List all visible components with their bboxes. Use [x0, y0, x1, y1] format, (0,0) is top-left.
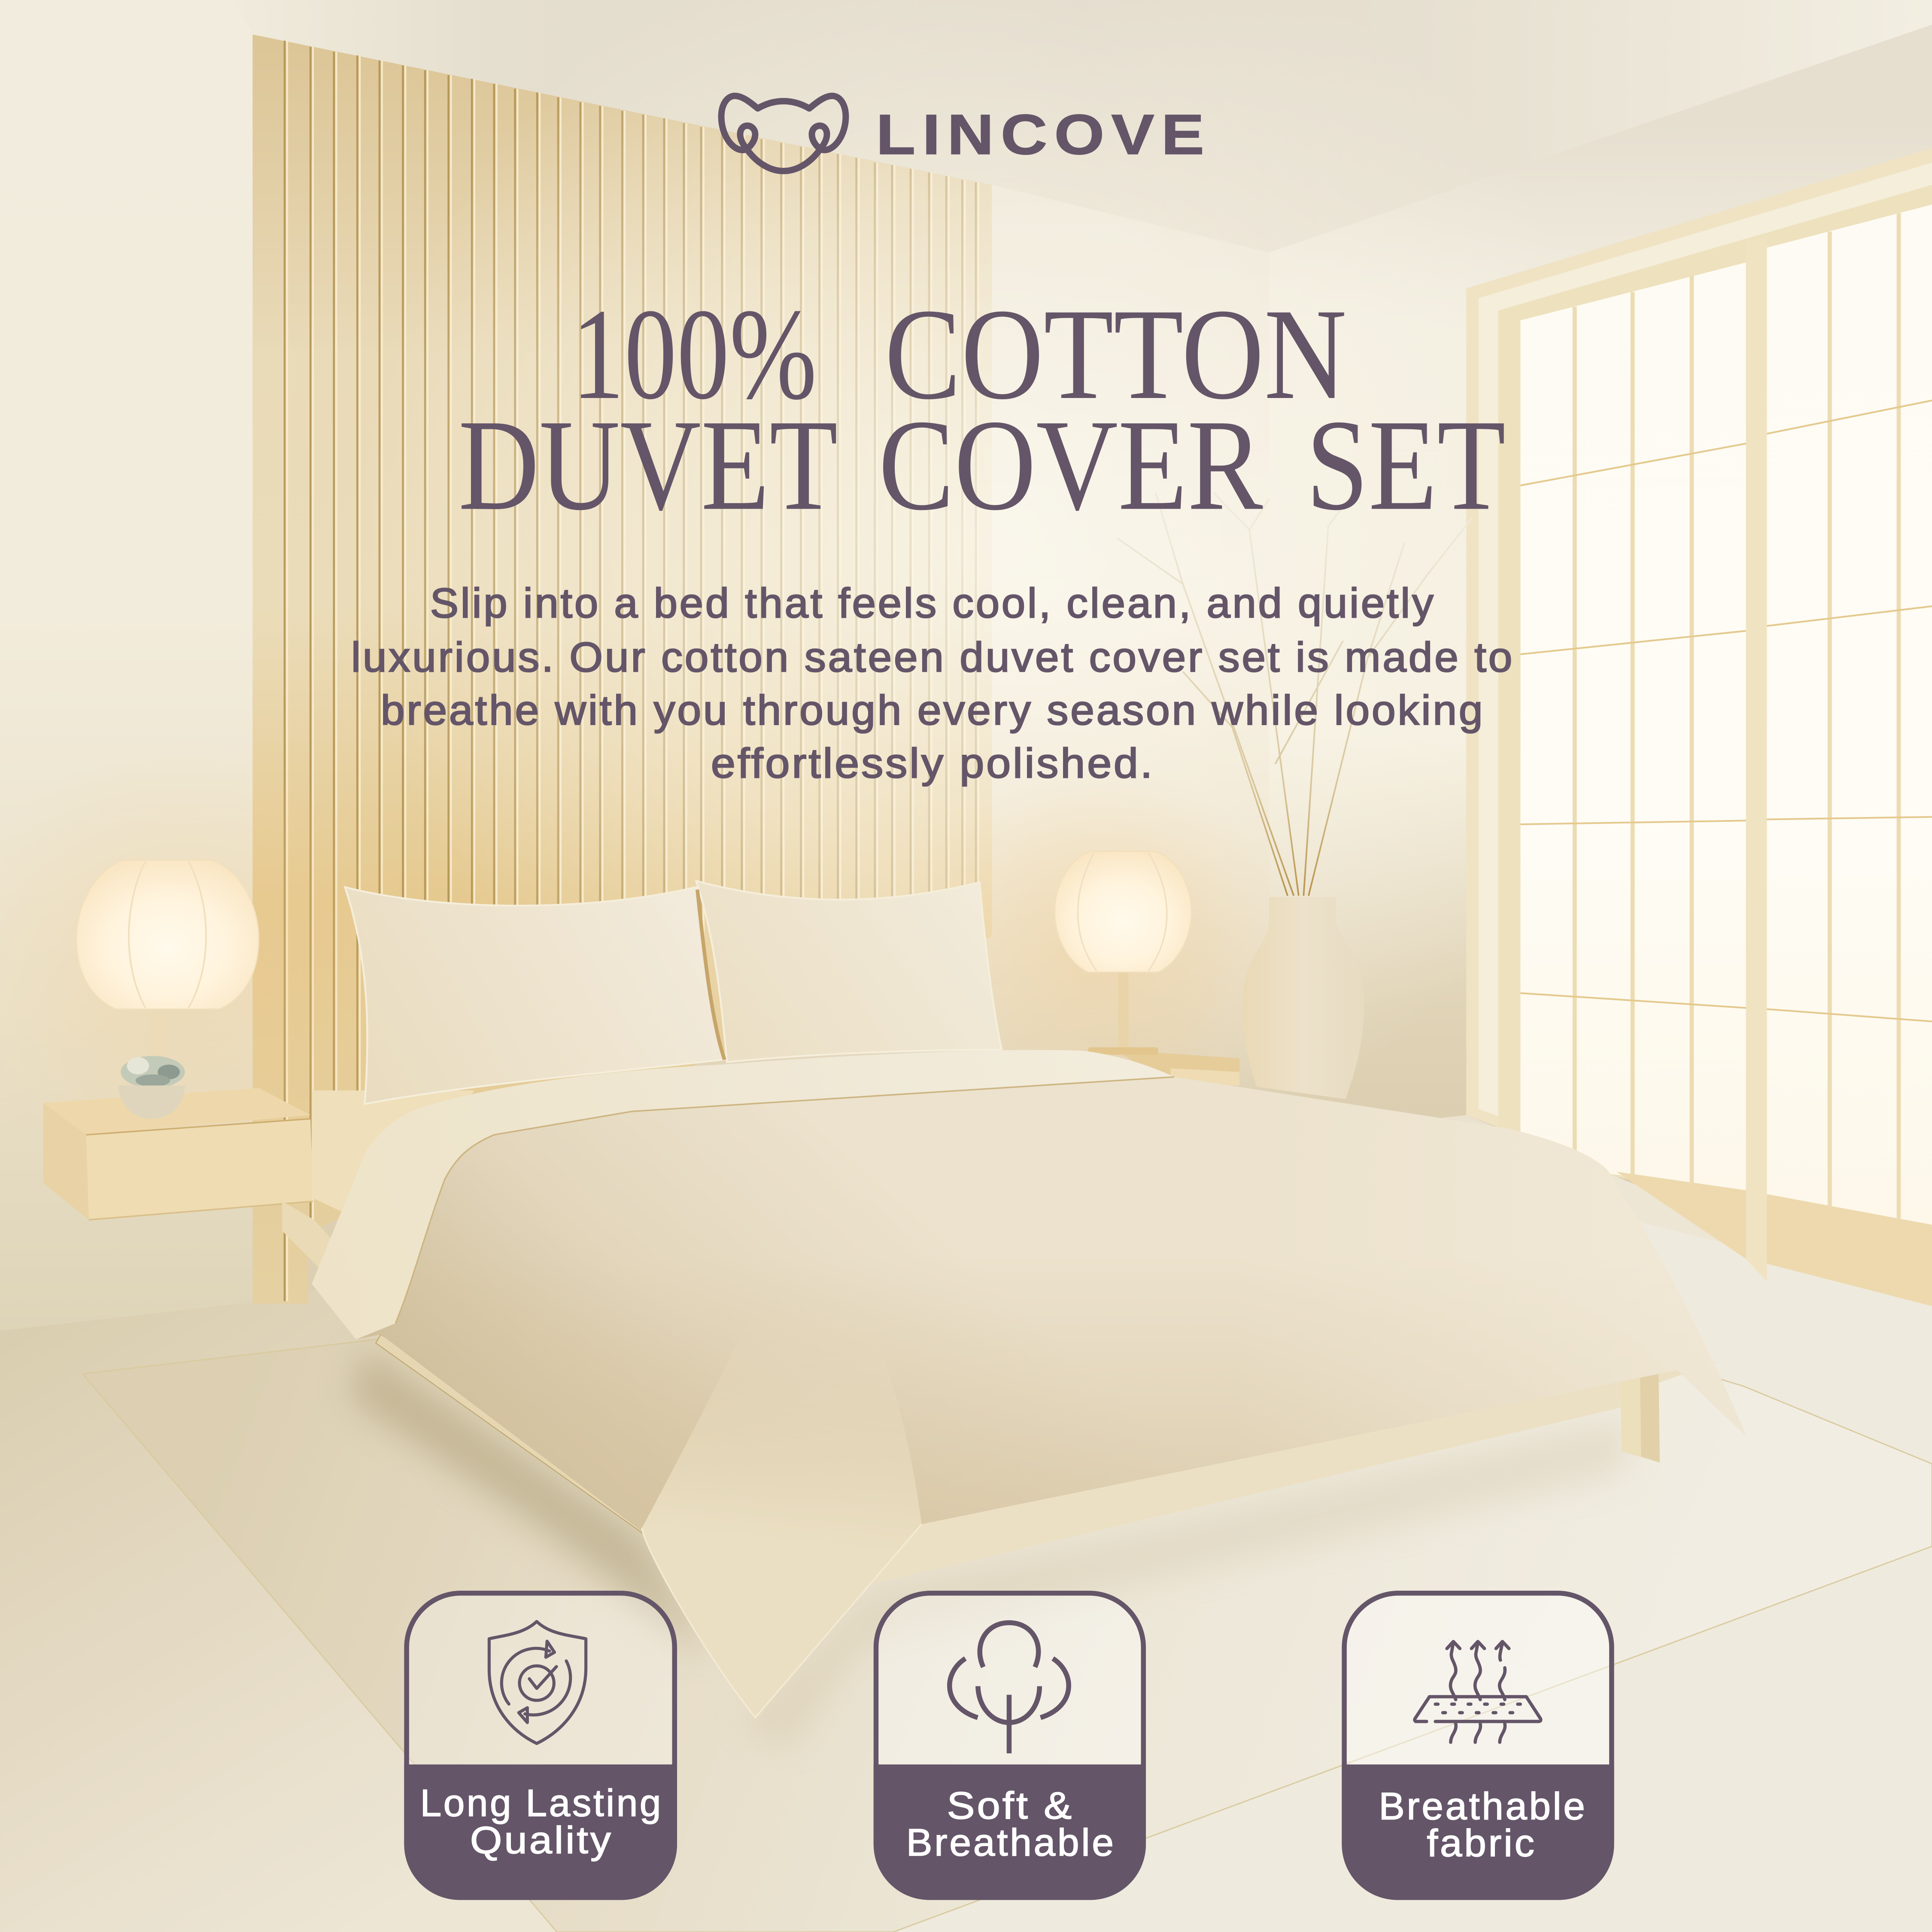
logo wordmark: LINCOVE	[876, 103, 1211, 166]
right lamp glow	[899, 764, 1294, 1133]
intro paragraph: Slip into a bed that feels cool, clean, and quietly	[430, 580, 1435, 626]
window reveal	[1479, 163, 1932, 1288]
center mullion	[1746, 237, 1767, 1282]
lower side rail	[282, 1201, 370, 1318]
right sash panes	[1767, 204, 1932, 1225]
wooden slat headboard	[252, 34, 992, 1303]
turned-down fold	[312, 1050, 1174, 1340]
duvet right highlight	[1232, 1087, 1746, 1461]
right pillow	[696, 881, 1002, 1062]
feature card: soft and breathable	[874, 1593, 1146, 1900]
brand logo	[721, 96, 1211, 171]
title: COVER	[878, 392, 1264, 537]
feature card: breathable fabric	[1342, 1593, 1614, 1900]
left lamp	[76, 860, 259, 1072]
bed leg	[1620, 1365, 1660, 1463]
right lamp	[1055, 851, 1191, 1055]
icon: cotton boll	[950, 1623, 1069, 1753]
intro paragraph: effortlessly polished.	[711, 740, 1154, 787]
window	[1466, 148, 1932, 1306]
left rail	[376, 1334, 649, 1533]
label: Breathable	[1379, 1784, 1587, 1827]
intro paragraph: breathe with you through every season while looking	[381, 687, 1485, 733]
rug	[82, 1232, 1932, 1932]
window casing	[1466, 148, 1932, 1306]
left lamp glow	[0, 739, 419, 1207]
intro paragraph: luxurious. Our cotton sateen duvet cover set is made to	[351, 634, 1514, 680]
intro paragraph	[351, 580, 1514, 787]
window inner frame	[1498, 185, 1932, 1245]
right floor	[893, 1183, 1932, 1932]
floor	[0, 1115, 1932, 1932]
bed frame	[282, 1201, 1719, 1585]
right nightstand	[1115, 1050, 1239, 1085]
front drape	[642, 1305, 922, 1718]
duvet	[312, 1050, 1746, 1718]
label: Long Lasting	[420, 1781, 663, 1824]
title	[459, 282, 1506, 537]
glazing bars vertical	[1575, 213, 1899, 1220]
potted plant	[118, 1056, 185, 1119]
glazing bars horizontal	[1520, 401, 1932, 1021]
ceiling	[234, 0, 1932, 252]
sill	[1616, 1172, 1932, 1306]
front rail	[869, 1361, 1719, 1585]
fitted sheet	[312, 1091, 474, 1214]
branches	[1118, 487, 1473, 896]
feature card: soft and breathable: Breathable	[906, 1821, 1116, 1864]
central light glow	[246, 0, 1602, 1232]
label: Soft &	[947, 1784, 1074, 1827]
right wall	[1269, 24, 1932, 1306]
duvet lower shading	[356, 1050, 1746, 1718]
back wall	[252, 34, 1269, 1306]
feature card: long lasting quality	[404, 1593, 677, 1900]
pillows and sheet	[312, 881, 1002, 1214]
left wall	[0, 0, 320, 1355]
duvet main body	[356, 1050, 1746, 1718]
title: DUVET	[459, 392, 838, 537]
logo mark	[721, 96, 846, 171]
floor shadow beneath bed	[351, 1349, 1626, 1750]
title: SET	[1306, 392, 1506, 537]
feature card: long lasting quality: Quality	[470, 1818, 613, 1861]
left pillow	[345, 887, 723, 1104]
left nightstand	[43, 1088, 313, 1220]
left sash panes	[1520, 262, 1746, 1190]
icon: shield with check	[489, 1622, 586, 1744]
vase body	[1242, 897, 1364, 1099]
feature card: breathable fabric: fabric	[1427, 1822, 1537, 1865]
vase with branches	[1118, 487, 1473, 1099]
icon: air through fabric	[1415, 1641, 1541, 1742]
title: 100%	[572, 282, 817, 426]
title: COTTON	[885, 282, 1347, 426]
